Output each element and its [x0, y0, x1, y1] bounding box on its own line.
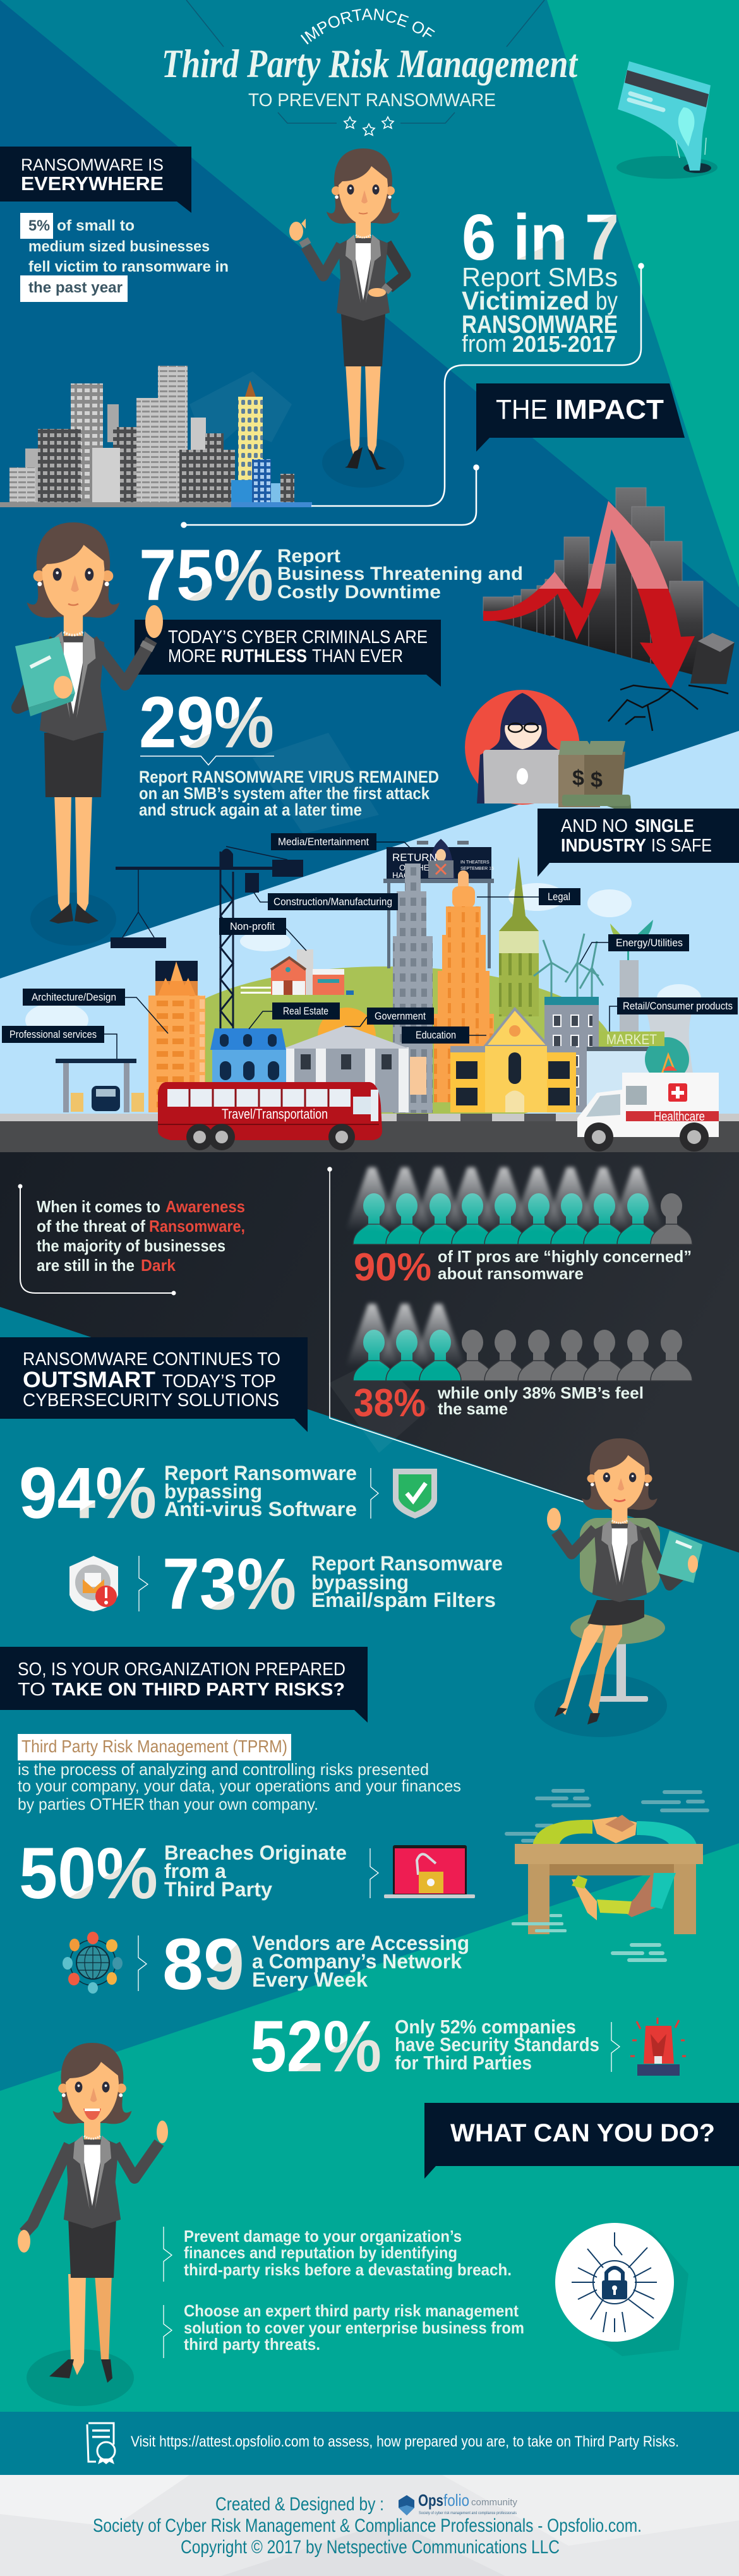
label: Energy/Utilities [580, 934, 689, 963]
sub: ambulance [577, 1066, 719, 1152]
icon: laptop with open lock [384, 1845, 475, 1898]
label: Non-profit [219, 918, 306, 951]
banner: is your organization prepared: SO, IS YOUR ORGANIZATION PREPARED [18, 1659, 345, 1680]
stat: 6 in 7: 2015-2017 [512, 331, 616, 357]
stat: 89 vendors: Vendors are Accessing [252, 1932, 469, 1954]
stat: 6 in 7: from [462, 331, 507, 358]
illustration: skyline [0, 366, 312, 507]
footer: credits: Copyright © 2017 by Netspective Communications LLC [181, 2537, 560, 2558]
stat: 75%: Costly Downtime [277, 582, 441, 603]
sub: hill [158, 966, 613, 1131]
label: Energy/Utilities: Energy/Utilities [616, 937, 683, 949]
sub: bus: Travel/Transportation [222, 1106, 328, 1122]
label: Government [345, 1008, 434, 1026]
stat: 90% [354, 1246, 692, 1289]
banner: cyber criminals: MORE [168, 646, 216, 666]
text: recommendation 1: Prevent damage to your organization’s [184, 2227, 462, 2246]
text: awareness callout: the majority of businesses [37, 1236, 225, 1255]
stat: 90%: of IT pros are “highly concerned” [438, 1247, 692, 1266]
banner: cyber criminals: THAN EVER [312, 646, 403, 666]
illustration: city scene [0, 839, 739, 1152]
stat: 90%: about ransomware [438, 1264, 584, 1283]
footer: credits [93, 2494, 642, 2558]
label: Real Estate: Real Estate [283, 1005, 328, 1017]
stat: 94%: Anti-virus Software [164, 1498, 357, 1520]
stat: 6 in 7: RANSOMWARE [462, 311, 618, 339]
stat: 89 vendors: a Company’s Network [252, 1950, 462, 1973]
icon: credit card from hole [616, 61, 718, 179]
label: Architecture/Design: Architecture/Design [32, 991, 116, 1003]
text: awareness callout [18, 1184, 245, 1295]
stat: 50%: Third Party [164, 1878, 272, 1901]
banner: ransomware is everywhere: EVERYWHERE [21, 172, 164, 195]
label: Non-profit: Non-profit [230, 920, 275, 932]
sub: dome and government building [283, 1008, 409, 1112]
icon: padlock circuit badge [555, 2223, 688, 2356]
banner: no single industry is safe: AND NO [561, 816, 628, 836]
logo: Opsfolio community: folio [443, 2491, 469, 2510]
title: Third Party Risk Management [162, 41, 579, 86]
sub: green tower [499, 857, 539, 1016]
text: TPRM definition [18, 1734, 461, 1814]
stat: 38%: the same [438, 1399, 508, 1418]
illustration: hacker with laptop and money bags: $ [591, 768, 603, 792]
text: recommendation 2: third party threats. [184, 2335, 320, 2354]
logo: Opsfolio community: community [471, 2497, 517, 2508]
text: recommendation 2: solution to cover your enterprise business from [184, 2318, 524, 2337]
woman presenter 4 [18, 2043, 168, 2406]
label: Legal: Legal [548, 891, 570, 903]
sub: gas station [56, 1059, 144, 1112]
banner: is your organization prepared [0, 1647, 368, 1723]
text: recommendation 2 [164, 2301, 524, 2358]
text: awareness callout: When it comes to [37, 1197, 160, 1216]
stat: 38% [354, 1381, 644, 1425]
banner: the impact [476, 383, 685, 452]
text: 5% of small to medium sized businesses: 5% [28, 217, 50, 234]
sub: billboard: HACK [392, 870, 415, 880]
sub: billboard [383, 839, 494, 968]
banner: cyber criminals: RUTHLESS [221, 646, 307, 666]
text: recommendation 2: Choose an expert third party risk management [184, 2301, 519, 2320]
footer: credits: Created & Designed by : [215, 2494, 384, 2515]
woman presenter 2 with folder [15, 522, 163, 946]
illustration: handshake over table with money under table [505, 1789, 709, 1962]
stat: 50%: from a [164, 1860, 226, 1882]
text: TPRM definition: to your company, your data, your operations and your finances [18, 1776, 461, 1795]
text: awareness callout: of the threat of [37, 1217, 145, 1236]
logo: Opsfolio community [399, 2491, 517, 2515]
text: 5% of small to medium sized businesses [20, 213, 229, 302]
banner: is your organization prepared: TO [18, 1680, 45, 1700]
stat: 50%: 50% [19, 1833, 158, 1914]
stat: 38%: while only 38% SMB’s feel [437, 1383, 644, 1402]
text: recommendation 1: finances and reputation by identifying [184, 2243, 457, 2262]
stat: 90%: 90% [354, 1246, 431, 1289]
banner: ransomware continues to outsmart: RANSOMWARE CONTINUES TO [23, 1349, 280, 1369]
text: 5% of small to medium sized businesses: of small to [57, 217, 135, 234]
label: Construction/Manufacturing: Construction/Manufacturing [273, 896, 392, 908]
text: 5% of small to medium sized businesses: medium sized businesses [28, 238, 210, 255]
banner: no single industry is safe: IS SAFE [651, 836, 712, 856]
stat: 73%: 73% [162, 1544, 296, 1625]
icon: green shield with check [393, 1469, 437, 1519]
banner: no single industry is safe: INDUSTRY [561, 836, 646, 856]
illustration: hacker with laptop and money bags: $ [572, 766, 584, 790]
chart: 90% people row [345, 1167, 692, 1244]
stat: 6 in 7: 6 in 7 [462, 201, 619, 274]
stat: 6 in 7: by [596, 286, 618, 315]
banner: ransomware continues to outsmart: TODAY’S TOP [162, 1371, 276, 1392]
background: teal middle [0, 1307, 739, 2091]
stat: 50%: Breaches Originate [164, 1841, 347, 1864]
sub: sidewalk and road [0, 1114, 739, 1152]
icon: certificate [87, 2423, 115, 2464]
connector lines [182, 264, 643, 527]
banner: no single industry is safe [538, 809, 739, 877]
stat: 52%: for Third Parties [395, 2052, 532, 2074]
text: recommendation 1 [164, 2227, 512, 2282]
divider line with diagonal [328, 1167, 584, 1502]
sub: crane [111, 846, 303, 1029]
banner: ransomware continues to outsmart [0, 1337, 308, 1432]
label: Real Estate [249, 1002, 340, 1029]
stat: 89 vendors: 89 [162, 1924, 244, 2005]
banner: what can you do: WHAT CAN YOU DO? [450, 2119, 715, 2147]
footer: paper background [0, 2475, 739, 2576]
sub: farm [241, 949, 354, 995]
background: dark panel [0, 1152, 739, 1553]
sub: billboard: OF THE [399, 863, 430, 872]
text: TPRM definition: is the process of analyzing and controlling risks presented [18, 1760, 429, 1779]
stat: 73%: bypassing [311, 1571, 409, 1594]
background: green corner [547, 0, 739, 587]
stat: 75% [139, 535, 523, 616]
stat: 89 vendors: Every Week [252, 1968, 368, 1991]
stat: 94%: 94% [19, 1453, 157, 1534]
stat: 6 in 7 [462, 201, 619, 358]
title: TO PREVENT RANSOMWARE [248, 90, 496, 111]
sub: billboard: IN THEATERS [460, 860, 490, 865]
sub: billboard: RETURN [392, 852, 437, 864]
sub: clouds [25, 883, 701, 1038]
text: 5% of small to medium sized businesses: fell victim to ransomware in [28, 258, 229, 275]
stat: 89 vendors [138, 1924, 469, 2005]
label: Education [402, 1026, 486, 1044]
banner: cyber criminals [135, 620, 441, 687]
banner: no single industry is safe: SINGLE [635, 816, 694, 836]
sub: wind turbines and factory [534, 934, 603, 1004]
banner: ransomware is everywhere [0, 147, 191, 213]
stat: 38%: 38% [354, 1381, 426, 1425]
label: Construction/Manufacturing [254, 893, 398, 910]
banner: ransomware continues to outsmart: OUTSMART [23, 1368, 155, 1392]
label: Professional services [2, 1026, 117, 1059]
background: sky [0, 731, 739, 1156]
banner: ransomware continues to outsmart: CYBERSECURITY SOLUTIONS [23, 1390, 279, 1411]
text: TPRM definition: by parties OTHER than your own company. [18, 1795, 318, 1814]
stat: 29%: on an SMB’s system after the first attack [139, 784, 430, 803]
label: Government: Government [375, 1010, 426, 1022]
stat: 75%: 75% [139, 535, 273, 616]
banner: the impact: IMPACT [555, 394, 664, 425]
stat: 50% [19, 1833, 378, 1914]
label: Media/Entertainment [271, 833, 412, 850]
label: Education: Education [416, 1029, 456, 1041]
sub: orange crown tower [148, 961, 205, 1112]
sub: yellow school [450, 1009, 576, 1112]
sub: blue house [210, 1028, 286, 1088]
band: teal call to action [0, 2412, 739, 2475]
sub: market [587, 1032, 689, 1112]
sub: gray apartment [544, 997, 599, 1112]
sub: billboard: SEPTEMBER 15 [460, 867, 494, 871]
illustration: falling bar chart with red arrow [483, 488, 735, 731]
title: IMPORTANCE OF [301, 9, 435, 44]
icon: globe network [63, 1932, 123, 1994]
woman presenter 3 sitting [534, 1438, 702, 1737]
label: Media/Entertainment: Media/Entertainment [278, 836, 369, 848]
stat: 75%: Business Threatening and [277, 563, 523, 584]
banner: cyber criminals: TODAY’S CYBER CRIMINALS ARE [168, 627, 428, 647]
stat: 73%: Report Ransomware [311, 1552, 503, 1575]
stat: 29%: 29% [139, 682, 274, 763]
stat: 94%: bypassing [164, 1480, 262, 1503]
sub: orange tower [434, 870, 494, 1102]
background: teal [0, 0, 739, 821]
text: TPRM definition: Third Party Risk Management (TPRM) [21, 1736, 287, 1756]
logo: Opsfolio community: Society of cyber risk management and compliance professionals [419, 2512, 517, 2515]
stat: 52%: 52% [250, 2006, 382, 2087]
sub: bus [158, 1082, 382, 1150]
stat: 94%: Report Ransomware [164, 1462, 357, 1484]
icon: email warning shield [69, 1556, 118, 1611]
watermark: fingerprint pentagons [189, 371, 430, 1453]
banner: is your organization prepared: TAKE ON THIRD PARTY RISKS? [52, 1680, 345, 1700]
sub: market: MARKET [606, 1032, 657, 1047]
text: 5% of small to medium sized businesses: the past year [28, 279, 123, 296]
background: blue diagonal [0, 0, 739, 985]
label: Retail/Consumer products [610, 997, 738, 1032]
stat: 73% [139, 1544, 503, 1625]
stat: 75%: Report [277, 546, 340, 567]
chart: 38% people row [345, 1304, 692, 1381]
sub: ambulance: Healthcare [654, 1110, 705, 1124]
icon: siren [630, 2018, 686, 2076]
illustration: hacker with laptop and money bags [465, 690, 632, 815]
banner: ransomware is everywhere: RANSOMWARE IS [21, 155, 164, 174]
text: awareness callout: Awareness [165, 1197, 245, 1216]
sub: gray tower [393, 864, 433, 1113]
stat: 52%: Only 52% companies [395, 2016, 576, 2038]
banner: what can you do [424, 2103, 739, 2179]
title [162, 0, 579, 136]
label: Legal [477, 888, 580, 905]
stat: 29%: Report RANSOMWARE VIRUS REMAINED [139, 767, 439, 786]
text: recommendation 1: third-party risks before a devastating breach. [184, 2260, 512, 2279]
stat: 29% [139, 682, 439, 819]
woman presenter 1 [289, 148, 406, 488]
stat: 6 in 7: Victimized [462, 286, 589, 315]
stat: 94% [19, 1453, 378, 1534]
logo: Opsfolio community: Ops [418, 2491, 443, 2510]
background: green lower [0, 1843, 739, 2412]
text: awareness callout: Ransomware, [149, 1217, 245, 1236]
stat: 6 in 7: Report SMBs [462, 262, 618, 292]
stat: 52%: have Security Standards [395, 2033, 599, 2055]
text: awareness callout: Dark [141, 1256, 176, 1275]
label: Architecture/Design [23, 989, 168, 1033]
label: Professional services: Professional services [9, 1028, 97, 1040]
stat: 52% [250, 2006, 620, 2087]
stat: 29%: and struck again at a later time [139, 800, 362, 819]
stat: 73%: Email/spam Filters [311, 1589, 496, 1611]
banner: the impact: THE [496, 394, 548, 425]
text: awareness callout: are still in the [37, 1256, 135, 1275]
